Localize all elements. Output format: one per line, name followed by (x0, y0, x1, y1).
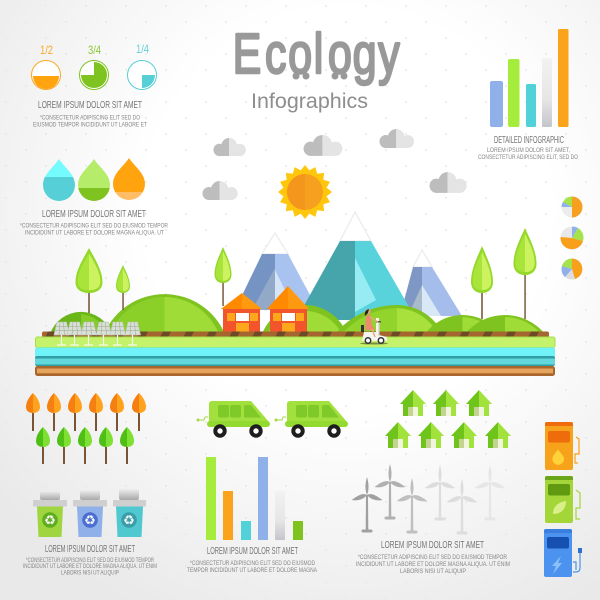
orange trees (26, 393, 146, 431)
icons: turbines (352, 464, 506, 534)
green trees (36, 427, 134, 464)
soil layer (35, 366, 555, 376)
lower chart description: TEMPOR INCIDIDUNT UT LABORE ET DOLORE MAGNA (187, 568, 317, 574)
solar panels (54, 322, 140, 345)
bin: teal: ♻ (123, 514, 135, 528)
lower chart description: *CONSECTETUR ADIPISCING ELIT SED DO EIUSMOD (190, 561, 316, 567)
drops description: *CONSECTETUR ADIPISCING ELIT SED DO EIUSMOD TEMPOR (20, 224, 169, 230)
turbines description: LABORIS NISI UT ALIQUIP (400, 569, 466, 575)
house: left (221, 293, 262, 333)
subtitle: Infographics (251, 90, 368, 113)
panel: lower bar chart (187, 457, 317, 574)
panel: fuel pumps (544, 422, 582, 577)
house: right (267, 286, 309, 333)
trees (76, 228, 536, 293)
gauge one quarter: 1/4 (136, 42, 149, 56)
gauge description (33, 116, 147, 128)
panel: water drops (20, 158, 169, 236)
hills (50, 294, 545, 334)
panel: tree rows (26, 393, 146, 464)
bins heading: LOREM IPSUM DOLOR SIT AMET (45, 544, 135, 555)
bar chart (490, 29, 568, 127)
panel: vans (196, 401, 348, 436)
pie charts (560, 196, 584, 280)
turbines description: *CONSECTETUR ADIPISCING ELIT SED DO EIUSMOD TEMPOR (358, 555, 508, 561)
chart description (478, 148, 578, 161)
water layer (35, 348, 555, 366)
icon: blue electric pump (544, 529, 582, 577)
turbines description (356, 555, 510, 575)
icon: sun (278, 165, 332, 219)
mountain: right blue (400, 250, 462, 316)
gauge three quarters: 3/4 (88, 43, 101, 57)
icon: van left (196, 401, 270, 436)
pie one (562, 196, 582, 218)
drop: orange (113, 158, 145, 200)
icons: green houses (385, 390, 511, 448)
gauge one half: 1/2 (40, 43, 53, 57)
turbines heading: LOREM IPSUM DOLOR SIT AMET (381, 540, 484, 551)
bins description: LABORIS NISI UT ALIQUIP (61, 570, 119, 576)
bin: green: ♻ (44, 514, 56, 528)
pie three (562, 258, 582, 280)
drop: teal (43, 159, 75, 201)
bins description (23, 558, 157, 576)
title: Ecology (233, 21, 400, 85)
bar chart (206, 457, 303, 540)
mountain: central teal (296, 212, 412, 320)
bins description: INCIDIDUNT UT LABORE ET DOLORE MAGNA ALIQUA. UT ENIM (23, 564, 157, 570)
lower chart description (187, 561, 317, 574)
chart description: CONSECTETUR ADIPISCING ELIT, SED DO (478, 155, 578, 161)
panel: wind turbines (352, 464, 510, 575)
panel: detailed infographic bar chart (478, 29, 578, 161)
panel: landscape (35, 212, 555, 376)
panel: fraction gauges (32, 42, 156, 128)
icon: orange fuel pump (545, 422, 579, 470)
icon: person on scooter (360, 309, 388, 344)
gauge heading: LOREM IPSUM DOLOR SIT AMET (38, 100, 142, 111)
drops description (20, 224, 169, 236)
gauge description: *CONSECTETUR ADIPISCING ELIT SED DO (40, 116, 140, 122)
turbines description: INCIDIDUNT UT LABORE ET DOLORE MAGNA ALIQUA. UT ENIM (356, 562, 510, 568)
grass layer (36, 337, 555, 348)
drops description: INCIDIDUNT UT LABORE ET DOLORE MAGNA ALIQUA. UT (25, 230, 164, 236)
bin: blue: ♻ (84, 514, 96, 528)
icon: green fuel pump (545, 476, 580, 523)
drop: green (78, 159, 110, 201)
mountain: left blue (235, 233, 318, 310)
drops heading: LOREM IPSUM DOLOR SIT AMET (42, 209, 146, 220)
icon: van right (274, 401, 348, 436)
chart description: LOREM IPSUM DOLOR SIT AMET, (487, 148, 570, 154)
soil strip (42, 332, 549, 338)
bins description: *CONSECTETUR ADIPISCING ELIT SED DO EIUSMOD TEMPOR (26, 558, 154, 564)
pie two (560, 226, 584, 250)
gauge description: EIUSMOD TEMPOR INCIDIDUNT UT LABORE ET (33, 122, 147, 128)
icon: clouds (202, 129, 467, 200)
tree trunks (88, 272, 526, 319)
lower chart heading: LOREM IPSUM DOLOR SIT AMET (207, 546, 298, 557)
panel: recycling bins (23, 489, 157, 576)
